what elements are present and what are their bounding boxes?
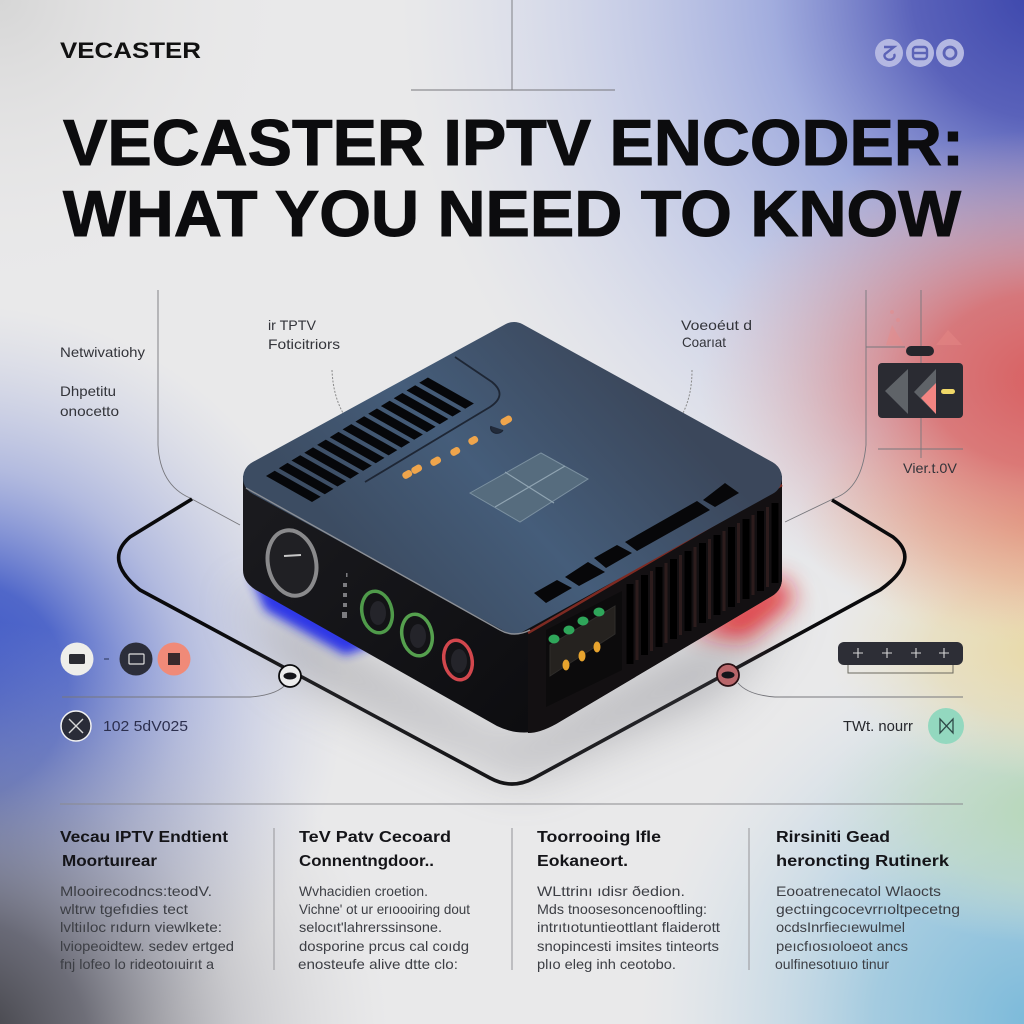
small port labels [342, 573, 348, 618]
annotation: IPTV label: Foticitriors [268, 336, 340, 352]
text column 1: Mlooirecodncs:teodV. [60, 883, 212, 899]
top right slots [534, 483, 739, 603]
text column 4: gectıingcocevrrıoltpecetng [776, 901, 960, 917]
callout connector lines [62, 290, 963, 697]
left face [243, 476, 782, 733]
top status LEDs [401, 414, 513, 480]
annotation: output label [681, 317, 752, 350]
top vents [266, 378, 474, 502]
text column 2: enosteufe alive dtte clo: [298, 956, 458, 972]
top face [261, 340, 764, 616]
text column 2: selocıt'lahrerssinsone. [299, 919, 442, 935]
text column 1 [59, 829, 234, 972]
annotation: left labels: Netwivatiohy [60, 344, 145, 360]
title: WHAT YOU NEED TO KNOW [63, 177, 962, 250]
text column 3: Toorrooing lfle [537, 829, 661, 846]
title [63, 106, 964, 250]
right spec item [843, 708, 964, 744]
right face with vents [528, 484, 782, 733]
text column 2: Wvhacidien croetion. [299, 883, 428, 899]
text column 4: heroncting Rutinerk [776, 853, 949, 870]
text column 2: dosporine prcus cal coıdg [299, 938, 469, 954]
right plus bar [838, 642, 963, 673]
annotation: IPTV label: ir TPTV [268, 317, 317, 333]
annotation: left labels: onocetto [60, 403, 119, 419]
text column 1: lvltiıloc rıdurn viewlkete: [60, 919, 222, 935]
right diagram icon: Vier.t.0V [903, 460, 958, 476]
title: VECASTER IPTV ENCODER: [63, 106, 964, 179]
text column 1: Vecau IPTV Endtient [60, 829, 229, 846]
text column 1: lviopeoidtew. sedev ertged [60, 938, 234, 954]
text column 2 [298, 829, 470, 972]
device shadow and glow [240, 575, 795, 775]
brand name: VECASTER [60, 38, 201, 63]
text column 3: Mds tnoosesoncenooftling: [537, 901, 707, 917]
floor screw right [717, 664, 739, 686]
port block [546, 591, 622, 707]
red jack [440, 638, 476, 682]
top center connector lines [411, 0, 615, 90]
annotation: left labels [60, 344, 145, 419]
encoder device [243, 340, 782, 733]
text column 3: WLttrinı ıdisr ðedion. [537, 883, 685, 899]
text column 4: ocdsInrfiecıewulmel [776, 919, 905, 935]
green jack two [398, 611, 436, 659]
annotation: output label: Coarıat [682, 334, 726, 350]
text column 1: fnj lofeo lo rideotoıuirıt a [60, 956, 214, 972]
device floor outline [119, 499, 905, 784]
dial [262, 526, 322, 600]
left spec item: 102 5dV025 [103, 718, 188, 735]
text column 3: snopincesti imsites tinteorts [537, 938, 719, 954]
text column 4: Rirsiniti Gead [776, 829, 890, 846]
text column 3: Eokaneort. [537, 853, 628, 870]
text column 3: plıo eleg inh ceotobo. [537, 956, 676, 972]
column dividers [274, 828, 749, 970]
green jack one [358, 588, 396, 636]
text column 2: Connentngdoor.. [299, 853, 434, 870]
text column 4 [775, 829, 960, 972]
text column 3: intrıtıotuntieottlant flaiderott [537, 919, 720, 935]
right spec item: TWt. nourr [843, 718, 913, 735]
annotation: IPTV label [268, 317, 340, 352]
text column 3 [537, 829, 720, 972]
text column 4: peıcfıosıoloeot ancs [776, 938, 908, 954]
touch panel [470, 453, 588, 522]
icon group: top right controls [875, 39, 964, 67]
text column 2: TeV Patv Cecoard [299, 829, 451, 846]
floor screw left [279, 665, 301, 687]
left spec item [61, 711, 188, 741]
left icon row [60, 642, 190, 676]
text column 2: Vichne' ot ur erıoooiring dout [299, 901, 470, 917]
section divider [60, 803, 963, 805]
right diagram icon [866, 290, 963, 476]
top groove [365, 357, 500, 482]
annotation: output label: Voeoéut d [681, 317, 752, 333]
top button [491, 426, 503, 433]
text column 4: Eooatrenecatol Wlaocts [776, 883, 941, 899]
annotation: left labels: Dhpetitu [60, 383, 116, 399]
text column 1: wltrw tgefıdies tect [59, 901, 188, 917]
text column 1: Moortuırear [62, 853, 157, 870]
text column 4: oulfinesotıuıo tinur [775, 956, 889, 972]
